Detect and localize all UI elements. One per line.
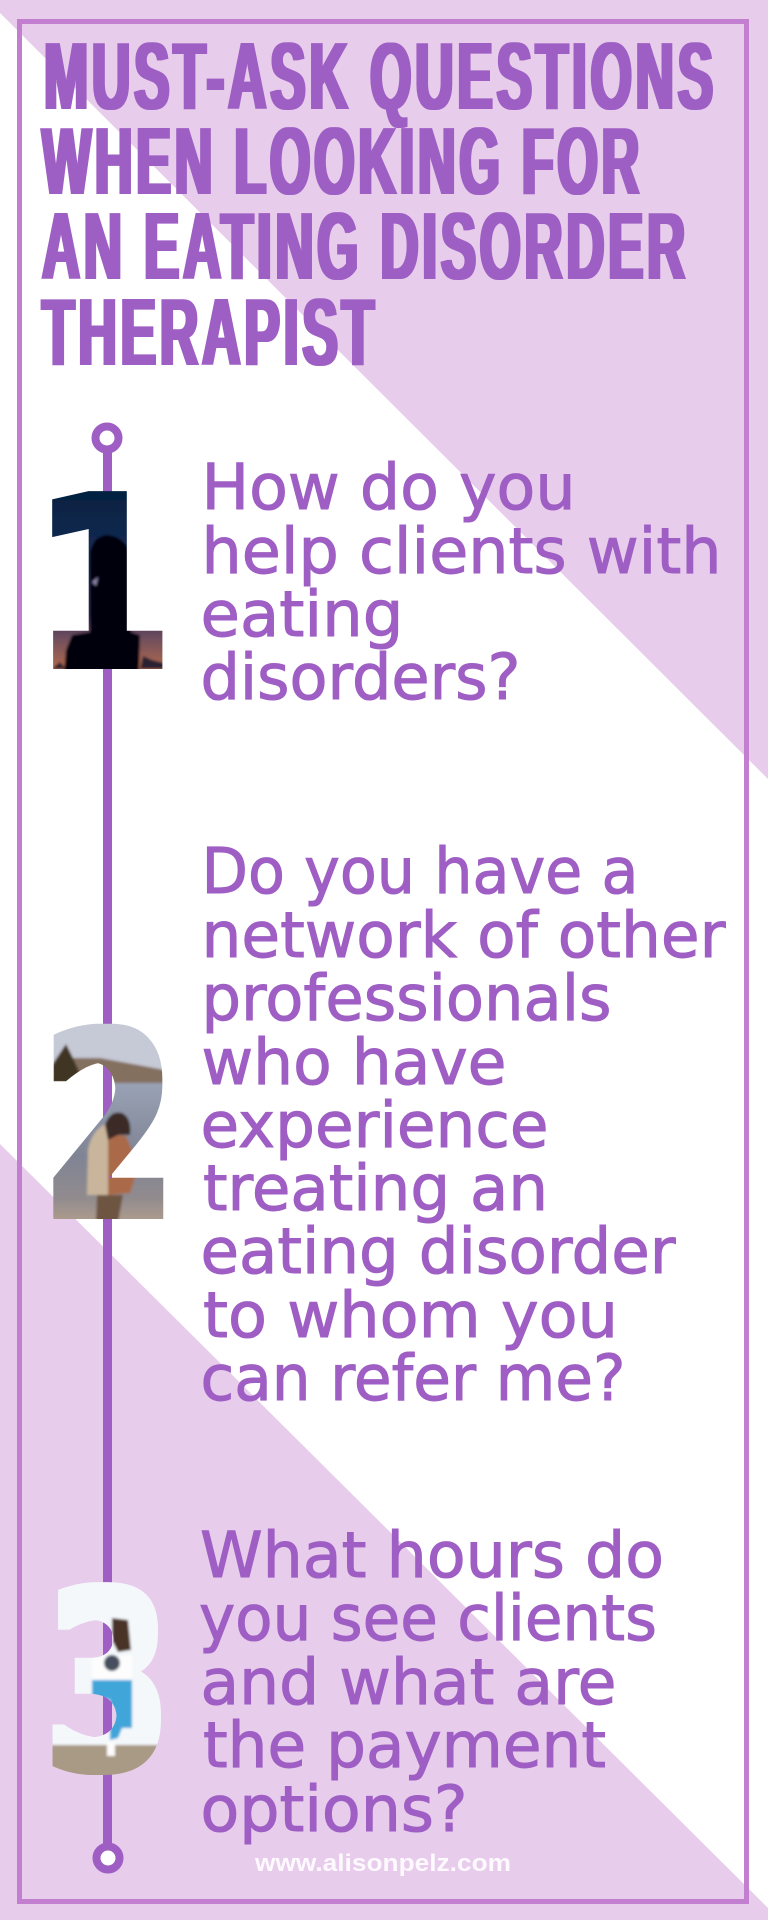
- question 2: to whom you: [203, 1279, 618, 1352]
- question 1: [200, 451, 722, 714]
- question 1: help clients with: [202, 515, 722, 588]
- question 1: How do you: [202, 451, 576, 524]
- question 3: [199, 1519, 664, 1846]
- question 2: network of other: [202, 899, 726, 972]
- question 2: experience: [200, 1089, 548, 1162]
- number 2 with photo fill: [53, 1024, 164, 1219]
- question 2: eating disorder: [200, 1215, 676, 1288]
- question 1: disorders?: [200, 641, 520, 714]
- question 1: eating: [200, 578, 404, 651]
- timeline: [96, 426, 120, 1870]
- website url: www.alisonpelz.com: [254, 1850, 511, 1877]
- question 2: who have: [202, 1026, 506, 1099]
- question 2: professionals: [202, 962, 612, 1035]
- question 3: What hours do: [200, 1519, 664, 1592]
- title: THERAPIST: [42, 279, 378, 386]
- number 3 with photo fill: [52, 1582, 161, 1775]
- question 3: you see clients: [199, 1582, 657, 1655]
- question 2: Do you have a: [202, 835, 638, 908]
- question 2: can refer me?: [200, 1342, 626, 1415]
- question 3: the payment: [203, 1709, 606, 1782]
- question 2: treating an: [203, 1152, 548, 1225]
- question 3: and what are: [200, 1646, 616, 1719]
- question 2: [200, 835, 726, 1415]
- title: [42, 23, 717, 386]
- number 1 with photo fill: [52, 491, 162, 669]
- question 3: options?: [200, 1773, 468, 1846]
